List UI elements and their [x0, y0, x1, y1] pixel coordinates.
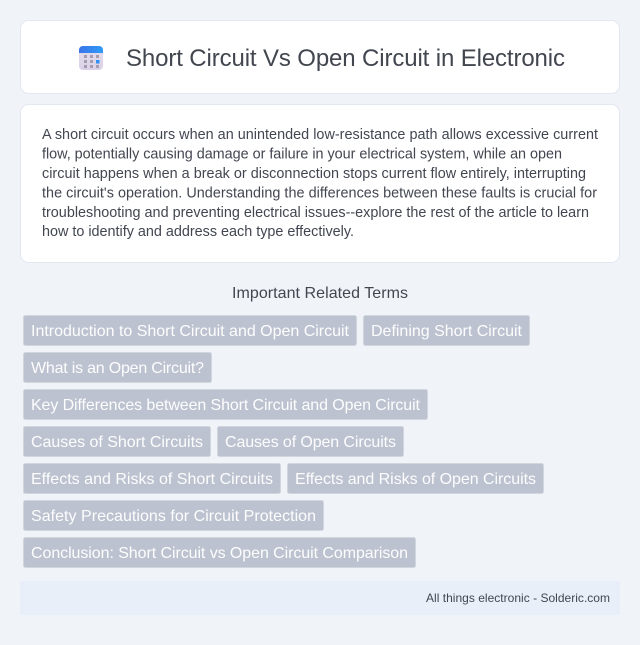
- tag: safety precautions: Safety Precautions for Circuit Protection: [31, 508, 316, 525]
- tag: conclusion: Conclusion: Short Circuit vs Open Circuit Comparison: [31, 545, 408, 562]
- tag: introduction: Introduction to Short Circuit and Open Circuit: [31, 323, 350, 340]
- tag: effects of short circuits: Effects and Risks of Short Circuits: [31, 471, 273, 488]
- tag: introduction: [24, 316, 356, 346]
- panel: header card: [20, 20, 620, 94]
- tag: causes of open circuits: Causes of Open Circuits: [225, 434, 396, 451]
- text block: summary: circuit happens when a break or disconnection stops current flow entirely, interrupting: [42, 166, 586, 182]
- text block: summary: [42, 127, 598, 240]
- tag: defining short circuit: [364, 316, 530, 346]
- heading: related terms: Important Related Terms: [232, 285, 408, 302]
- icon: calendar grid: [79, 46, 103, 70]
- tag: conclusion: [24, 538, 416, 568]
- tag: causes of open circuits: [218, 426, 404, 456]
- panel: summary paragraph card: [20, 104, 620, 262]
- tag: effects of short circuits: [24, 464, 280, 494]
- text block: summary: how to identify and address each type effectively.: [42, 224, 354, 240]
- tag: key differences: [24, 390, 428, 420]
- tag: causes of short circuits: [24, 426, 210, 456]
- tag: what is an open circuit: What is an Open Circuit?: [31, 360, 204, 377]
- tag: key differences: Key Differences between Short Circuit and Open Circuit: [31, 397, 421, 414]
- tag: causes of short circuits: Causes of Short Circuits: [31, 434, 203, 451]
- tag: defining short circuit: Defining Short Circuit: [371, 323, 523, 340]
- text block: summary: the circuit's operation. Understanding the differences between these faults is crucial for: [42, 186, 597, 202]
- tag: effects of open circuits: [288, 464, 544, 494]
- tag: what is an open circuit: [24, 352, 212, 382]
- panel: related term tags: [24, 316, 544, 568]
- tag: safety precautions: [24, 500, 324, 530]
- title: Short Circuit Vs Open Circuit in Electronic: [126, 45, 565, 72]
- text block: summary: flow, potentially causing damage or failure in your electrical system, while an open: [42, 146, 562, 162]
- text block: summary: A short circuit occurs when an unintended low-resistance path allows excessive current: [42, 127, 598, 143]
- text block: summary: troubleshooting and preventing electrical issues--explore the rest of the article to learn: [42, 205, 589, 221]
- footer bar: [20, 581, 620, 615]
- tag: effects of open circuits: Effects and Risks of Open Circuits: [295, 471, 536, 488]
- footer credit: All things electronic - Solderic.com: [426, 591, 610, 605]
